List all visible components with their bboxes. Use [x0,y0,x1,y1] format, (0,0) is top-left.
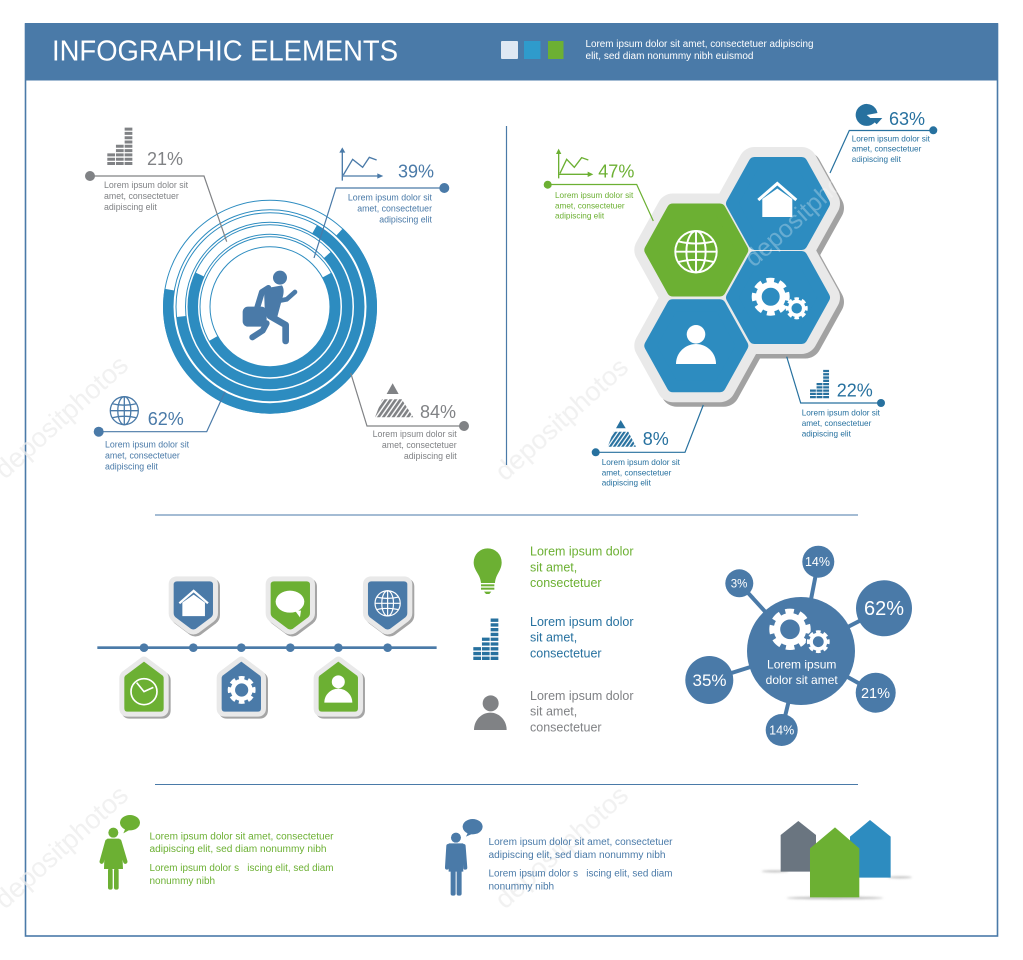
leader lines [548,130,933,452]
callout: 47%: 47% [598,162,634,182]
callout: 84%: Lorem ipsum dolor sit [373,429,457,439]
watermarks [0,350,634,914]
tag: gear [222,662,263,714]
callout: 84%: 84% [420,402,456,422]
legend item: bars: Lorem ipsum dolor [530,615,634,629]
tag: person [319,662,360,714]
legend item: bulb [474,545,634,594]
bubble: 62%: 62% [864,598,904,620]
callout: 62%: amet, consectetuer [105,451,180,461]
callout: 62%: adipiscing elit [105,462,158,472]
house: grey [781,821,816,872]
panel: three houses [762,820,912,899]
callout: 8%: amet, consectetuer [602,468,672,477]
callout: 39%: 39% [398,162,434,182]
callout: 8%: 8% [643,429,669,449]
bubble: 62% [856,580,912,636]
tag: clock [124,662,166,714]
legend item: bars: sit amet, [530,631,577,645]
panel: ring chart [85,127,469,472]
callout: 84%: adipiscing elit [404,451,457,461]
icon: man with speech bubble [447,819,483,896]
hexagon: home [732,163,824,244]
panel: icon legend [474,545,634,734]
man text: Lorem ipsum dolor sit amet, consectetuer [488,837,673,848]
central bubble: Lorem ipsum [767,657,836,671]
callout: 39%: amet, consectetuer [357,204,432,214]
watermarks: depositphotos [489,780,634,914]
woman text: adipiscing elit, sed diam nonummy nibh [150,844,326,855]
header band [25,23,998,80]
callout: 62%: Lorem ipsum dolor sit [105,439,190,449]
callout: 63%: Lorem ipsum dolor sit [852,134,931,143]
man text [488,837,673,892]
house shadows [762,870,912,899]
callout: 63%: adipiscing elit [852,155,902,164]
callout: 21%: amet, consectetuer [104,191,179,201]
woman text [150,832,334,887]
watermark over hexagons: depositphotos [739,147,874,272]
panel: timeline [97,581,437,714]
hexagon backing [650,163,824,386]
watermarks: depositphotos [489,352,634,486]
panel: bubble network [685,546,912,746]
callout: 22%: 22% [837,381,873,401]
callout: 21%: Lorem ipsum dolor sit [104,180,189,190]
bubble: 21%: 21% [861,686,890,702]
bubble: 3%: 3% [731,578,747,590]
callout: 62%: 62% [148,409,184,429]
header description: elit, sed diam nonummy nibh euismod [586,51,754,62]
callout: 63%: amet, consectetuer [852,145,922,154]
hexagon: globe [650,210,742,290]
shield: speech bubble [271,581,312,631]
bubble: 35%: 35% [692,671,727,690]
man text: nonummy nibh [488,882,554,892]
legend item: bars [477,615,634,660]
leader lines [90,176,464,432]
legend item: bars: consectetuer [530,646,602,660]
timeline axis [97,643,437,652]
hexagon: person [650,305,742,386]
panel: man quote [447,819,673,896]
vertical divider [506,126,508,465]
bubble: 14% bottom [766,714,798,746]
man text: adipiscing elit, sed diam nonummy nibh [488,850,666,861]
callout: 47%: amet, consectetuer [555,201,625,210]
callout: 63%: 63% [889,109,925,129]
title: INFOGRAPHIC ELEMENTS [52,36,398,68]
shield: home [174,581,215,631]
callout: 22%: amet, consectetuer [802,419,872,428]
callout: 22%: adipiscing elit [802,429,852,438]
central bubble: dolor sit amet [766,673,838,687]
bubble: 14% top [802,546,834,578]
house: green [810,827,859,897]
connectors [709,562,884,730]
bubble: 14% top: 14% [805,555,830,569]
callout: 39%: adipiscing elit [379,215,433,225]
callout: 39%: Lorem ipsum dolor sit [348,193,433,203]
bubble: 21% [856,673,896,713]
callout: 22% [802,369,885,438]
legend item: person: sit amet, [530,705,577,719]
bubble: 14% bottom: 14% [769,723,794,737]
woman text: Lorem ipsum dolor sit amet, consectetuer [150,832,334,842]
callout: 39% [339,147,449,225]
shield: globe [368,581,409,631]
header description: Lorem ipsum dolor sit amet, consectetuer adipiscing [586,39,814,50]
callout: 8%: Lorem ipsum dolor sit [602,458,681,467]
man text: Lorem ipsum dolor s iscing elit, sed diam [488,868,672,880]
icon: running businessman [243,271,295,341]
hexagon: gears [732,257,824,338]
legend item: person: Lorem ipsum dolor [530,689,634,703]
callout: 62% [94,397,190,472]
callout: 21%: adipiscing elit [104,202,157,212]
callout: 21%: 21% [147,149,183,169]
callout: 22%: Lorem ipsum dolor sit [802,409,881,418]
callout: 8%: adipiscing elit [602,479,652,488]
bubble: 3% [725,569,753,597]
legend item: bulb: Lorem ipsum dolor [530,545,634,559]
house: blue [850,820,891,878]
panel: woman quote [102,815,334,890]
callout: 84% [373,383,469,461]
icon: woman with speech bubble [102,815,140,890]
header description [586,39,814,62]
callout: 47%: Lorem ipsum dolor sit [555,191,634,200]
legend item: bulb: consectetuer [530,576,602,590]
callout: 8% [592,420,681,488]
callout: 47% [544,149,634,221]
hexagon shadow [654,168,828,391]
legend item: person: consectetuer [530,720,602,734]
legend item: person [474,689,634,734]
callout: 47%: adipiscing elit [555,212,605,221]
central bubble [747,597,855,705]
woman text: nonummy nibh [150,876,215,887]
woman text: Lorem ipsum dolor s iscing elit, sed diam [150,863,334,874]
panel: hexagon cluster [544,104,937,488]
header colour squares [501,41,564,59]
callout: 21% [85,127,189,212]
callout: 84%: amet, consectetuer [382,440,457,450]
legend item: bulb: sit amet, [530,560,577,574]
concentric rings [164,200,376,413]
bubble: 35% [685,656,733,704]
callout: 63% [852,104,937,164]
